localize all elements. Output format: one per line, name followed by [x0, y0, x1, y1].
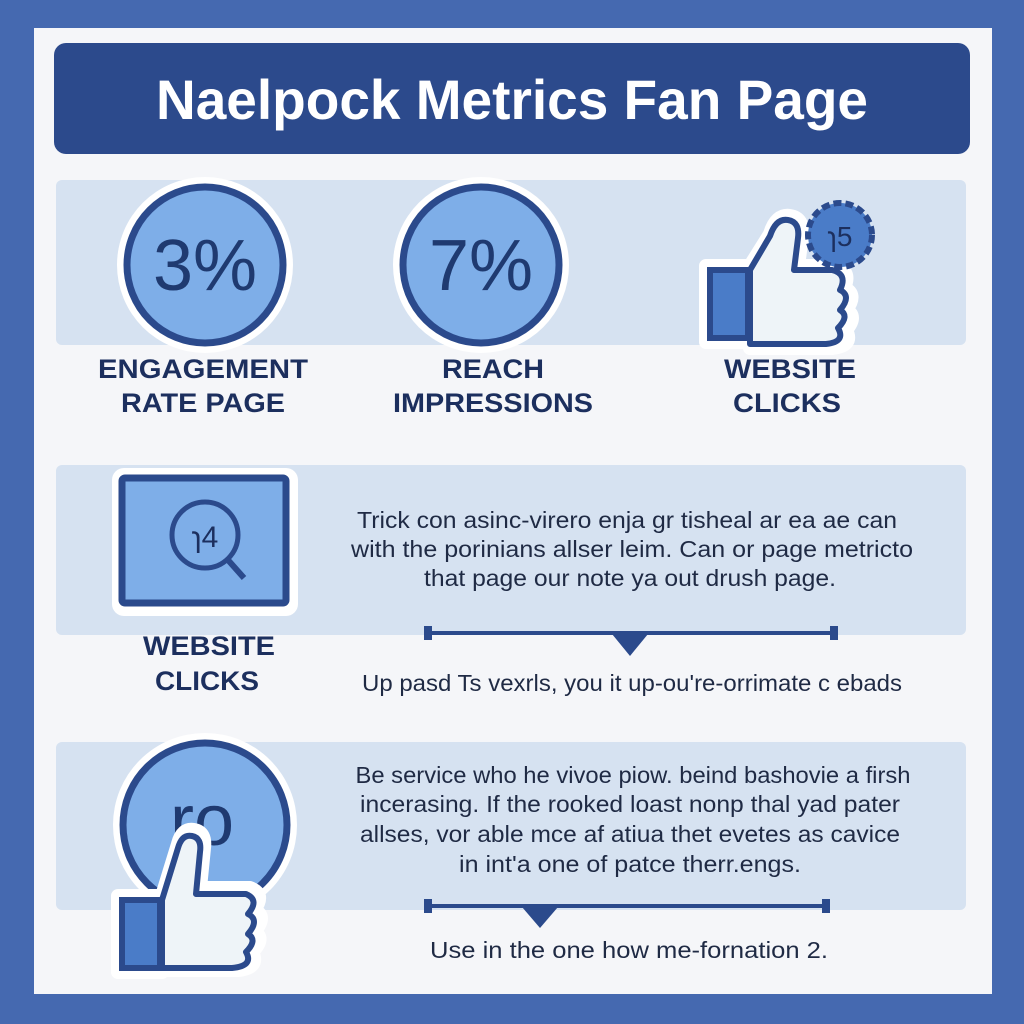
icon: thumbs up with badge: [706, 203, 872, 418]
metric: engagement 3%: RATE PAGE: [121, 388, 285, 418]
caption: Up pasd Ts vexrls, you it up-ou're-orrimate c ebads: [362, 670, 902, 696]
text block: Trick con asinc-virero enja gr tisheal ar ea ae can: [357, 507, 897, 533]
icon: thumbs up with badge: WEBSITE: [724, 354, 856, 384]
label: website clicks: WEBSITE: [143, 631, 275, 661]
metric: reach 7%: [393, 177, 593, 418]
text block: incerasing. If the rooked loast nonp thal yad pater: [360, 791, 900, 817]
metric: engagement 3%: ENGAGEMENT: [98, 354, 309, 384]
metric: reach 7%: REACH: [442, 354, 544, 384]
icon: circle with thumbs up: [113, 733, 297, 972]
metric: engagement 3%: [98, 177, 309, 418]
icon: thumbs up with badge: CLICKS: [733, 388, 841, 418]
caption: Use in the one how me-fornation 2.: [430, 937, 828, 963]
title bar: [54, 43, 970, 154]
connector arrow: [424, 626, 838, 656]
text block: allses, vor able mce af atiua thet evetes as cavice: [360, 821, 900, 847]
connector arrow: [424, 899, 830, 928]
metric: reach 7%: 7%: [429, 226, 533, 306]
metric: engagement 3%: 3%: [153, 226, 257, 306]
label: website clicks: CLICKS: [155, 666, 259, 696]
panel: top metrics: [56, 177, 966, 418]
icon: monitor with magnifier: [112, 468, 298, 616]
text block: Be service who he vivoe piow. beind bashovie a firsh: [356, 762, 910, 788]
label: website clicks: [143, 631, 275, 696]
text block: with the porinians allser leim. Can or page metricto: [350, 536, 913, 562]
icon: thumbs up with badge: ɿ5: [828, 221, 852, 252]
text block: in int'a one of patce therr.engs.: [459, 851, 801, 877]
panel: website clicks: [56, 465, 966, 696]
panel: engagement tips: [56, 733, 966, 972]
metric: reach 7%: IMPRESSIONS: [393, 388, 593, 418]
text block: that page our note ya out drush page.: [424, 565, 836, 591]
title bar: Naelpock Metrics Fan Page: [156, 68, 868, 131]
icon: monitor with magnifier: ɿ4: [192, 521, 218, 554]
text block: [350, 507, 913, 591]
icon: circle with thumbs up: ro: [170, 781, 234, 861]
text block: [356, 762, 910, 877]
